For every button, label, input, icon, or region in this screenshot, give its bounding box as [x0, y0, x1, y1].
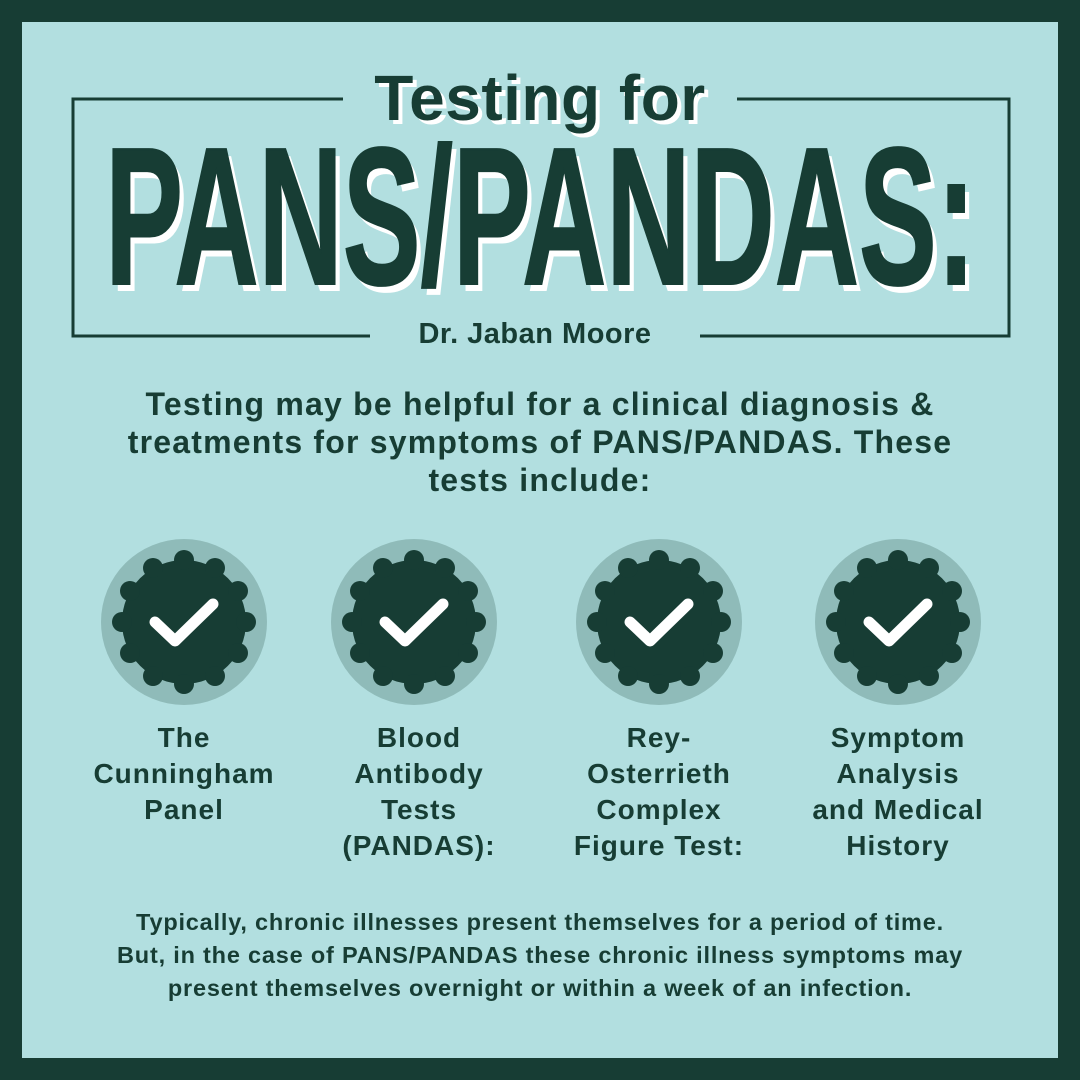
- label 3: Complex: [596, 794, 722, 825]
- label 4: Analysis: [836, 758, 960, 789]
- bottom text: But, in the case of PANS/PANDAS these chronic illness symptoms may: [117, 942, 963, 968]
- intro text: tests include:: [428, 462, 652, 498]
- icon: check badge 2: [331, 539, 497, 705]
- label 3: Rey-: [627, 722, 691, 753]
- bottom text: Typically, chronic illnesses present themselves for a period of time.: [136, 909, 944, 935]
- title: Testing for: Testing for: [374, 62, 706, 134]
- label 2: (PANDAS):: [342, 830, 496, 861]
- label 3: Osterrieth: [587, 758, 731, 789]
- label 1: Cunningham: [93, 758, 275, 789]
- intro text: [128, 386, 952, 498]
- label 3: [574, 722, 744, 861]
- label 3: Figure Test:: [574, 830, 744, 861]
- icon: check badge 1: [101, 539, 267, 705]
- label 1: The: [158, 722, 210, 753]
- label 2: Tests: [381, 794, 457, 825]
- label 4: [812, 722, 984, 861]
- label 4: Symptom: [831, 722, 965, 753]
- intro text: Testing may be helpful for a clinical diagnosis &: [145, 386, 935, 422]
- icon: check badge 3: [576, 539, 742, 705]
- title: PANS/PANDAS: PANS/PANDAS:: [105, 107, 975, 326]
- bottom text: [117, 909, 963, 1001]
- bottom text: present themselves overnight or within a week of an infection.: [168, 975, 912, 1001]
- label 4: History: [846, 830, 950, 861]
- label 4: and Medical: [812, 794, 984, 825]
- label 2: Antibody: [354, 758, 484, 789]
- label 1: [93, 722, 275, 825]
- label 1: Panel: [144, 794, 224, 825]
- author: Dr. Jaban Moore: [418, 318, 652, 350]
- icon: check badge 4: [815, 539, 981, 705]
- label 2: [342, 722, 496, 861]
- label 2: Blood: [377, 722, 461, 753]
- intro text: treatments for symptoms of PANS/PANDAS. These: [128, 424, 952, 460]
